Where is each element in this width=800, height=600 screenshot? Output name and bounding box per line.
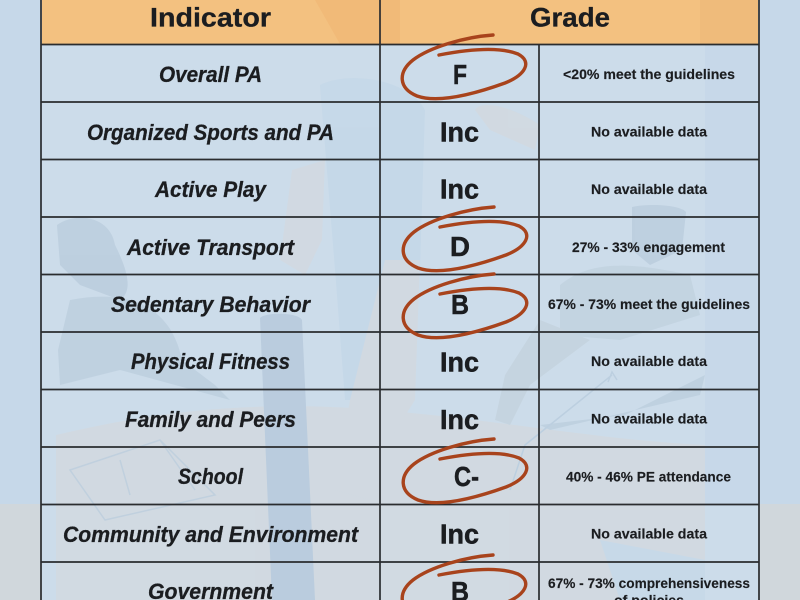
grade notes: No available data (591, 526, 708, 542)
indicator labels: Overall PA (159, 62, 262, 87)
heading: Grade: Grade (530, 2, 610, 32)
grade notes: <20% meet the guidelines (563, 67, 735, 82)
grade values: Inc (440, 116, 479, 148)
grade notes: No available data (591, 412, 708, 426)
circle: grade B sedentary (403, 274, 527, 338)
indicator labels: Physical Fitness (131, 349, 290, 374)
grade notes: 67% - 73% meet the guidelines (548, 297, 750, 312)
grade notes: 67% - 73% comprehensiveness (548, 576, 750, 591)
grade values: F (453, 59, 467, 90)
grade values: Inc (440, 346, 479, 378)
grade values: C- (454, 461, 479, 492)
grade notes: 27% - 33% engagement (572, 240, 726, 255)
indicator labels: Active Play (154, 177, 268, 202)
grade values: Inc (440, 404, 479, 435)
circle: grade C- (403, 439, 527, 503)
grade notes: No available data (591, 354, 708, 369)
indicator labels: School (178, 464, 244, 489)
grade values (440, 59, 479, 600)
grade notes: 40% - 46% PE attendance (566, 470, 731, 484)
grade values: Inc (440, 174, 479, 204)
circle: grade D (403, 207, 527, 271)
indicator labels: Family and Peers (125, 407, 296, 432)
heading: Indicator: Indicator (150, 2, 272, 32)
circle: grade F (402, 35, 526, 99)
indicator labels: Organized Sports and PA (87, 120, 334, 145)
grade values: D (450, 231, 470, 262)
table header band (42, 0, 758, 44)
grade notes: No available data (591, 124, 708, 140)
grade notes (548, 67, 750, 600)
circle: grade B government (402, 555, 526, 600)
indicator labels: Sedentary Behavior (111, 292, 311, 317)
grade notes: No available data (591, 182, 708, 197)
indicator labels: Community and Environment (63, 522, 360, 547)
grade values: B (451, 289, 469, 320)
indicator labels: Active Transport (126, 235, 296, 260)
grade values: Inc (440, 518, 479, 550)
indicator labels (63, 62, 360, 600)
